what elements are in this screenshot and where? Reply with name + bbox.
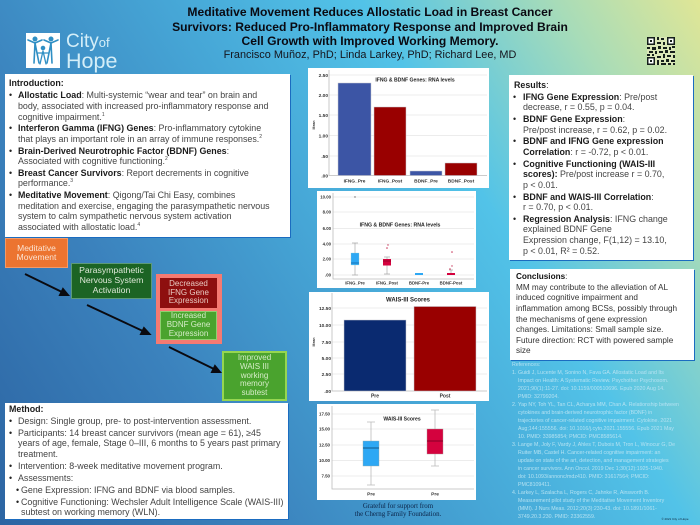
- references: Lange M, Joly F, Vardy J, Ahles T, Dubois M, Tron L, Winocur G, De: [518, 442, 675, 448]
- panel: results: r = 0.70, p < 0.01.: [523, 202, 593, 212]
- panel: method: Design: Single group, pre- to post-intervention assessment.: [18, 416, 251, 426]
- panel: conclusions: MM may contribute to the alleviation of AL: [516, 283, 668, 292]
- panel: conclusions: [510, 269, 694, 360]
- acknowledgement: Grateful for support from: [363, 503, 433, 510]
- references: 10. PMID: 33985854; PMCID: PMC8585614.: [518, 434, 622, 440]
- panel: results: Correlation: r = -0.72, p < 0.01.: [523, 147, 648, 157]
- panel: conclusions: size: [516, 346, 531, 355]
- copyright: © 2021 City of Hope: [661, 517, 689, 521]
- panel: introduction: cognitive impairment.1: [18, 112, 105, 122]
- logo: City of Hope: Hope: [66, 49, 117, 73]
- box plot: WAIS-III scores: 7.50: [321, 474, 331, 478]
- bar chart: RNA levels means: .50: [321, 154, 328, 160]
- panel: introduction: Brain-Derived Neurotrophic Factor (BDNF) Genes:: [18, 146, 229, 156]
- flow box: gene expression group: [156, 274, 222, 344]
- panel: results: Pre/post increase, r = 0.62, p = 0.02.: [523, 125, 667, 135]
- box plot: WAIS-III scores: 17.50: [319, 412, 331, 416]
- references: 2.: [512, 402, 516, 408]
- flow box: parasympathetic activation: Nervous System: [80, 275, 143, 285]
- panel: results: Regression Analysis: IFNG change: [523, 214, 668, 224]
- bar chart: RNA levels means: BDNF_Post: [448, 178, 475, 184]
- title: Cell Growth with Improved Working Memory.: [242, 34, 498, 48]
- flow box: increased BDNF: BDNF Gene: [167, 320, 210, 329]
- box plot: RNA levels: BDNF-Pre: [409, 280, 430, 286]
- bar chart: RNA levels means: 2.50: [319, 73, 328, 79]
- flow box: improved WAIS III: [222, 351, 287, 401]
- references: 3.: [512, 442, 516, 448]
- panel: results: Cognitive Functioning (WAIS-III: [523, 159, 655, 169]
- flow box: meditative movement: Meditative: [17, 243, 56, 253]
- box plot: RNA levels: 6.00: [323, 226, 332, 231]
- bar chart: WAIS-III scores means: [309, 292, 489, 401]
- box plot: WAIS-III scores: 15.00: [319, 426, 331, 432]
- panel: introduction: performance.3: [18, 178, 73, 188]
- flow box: decreased IFNG: Decreased: [169, 279, 208, 288]
- bar chart: WAIS-III scores means: Post: [440, 394, 451, 400]
- authors: Francisco Muñoz, PhD; Linda Larkey, PhD; Richard Lee, MD: [224, 48, 516, 60]
- bar chart: WAIS-III scores means: Pre: [371, 394, 379, 400]
- panel: method: Assessments:: [18, 473, 73, 483]
- bar chart: WAIS-III scores means: 2.50: [322, 372, 331, 378]
- panel: method: Participants: 14 breast cancer survivors (mean age = 61), ≥45: [18, 428, 261, 438]
- box plot: RNA levels: IFNG & BDNF Genes: RNA levels: [360, 222, 441, 228]
- box plot: RNA levels: BDNF-Post: [440, 280, 463, 286]
- title: Meditative Movement Reduces Allostatic Load in Breast Cancer: [187, 5, 553, 19]
- acknowledgement: the Cherng Family Foundation.: [355, 511, 441, 518]
- box plot: WAIS-III scores: Pre: [367, 492, 375, 498]
- panel: method: [5, 403, 288, 519]
- references: Impact on Health: A Systematic Review. Psychother Psychosom.: [518, 378, 668, 384]
- panel: introduction: Meditative Movement: Qigong/Tai Chi Easy, combines: [18, 190, 235, 200]
- panel: results: [509, 75, 693, 260]
- panel: results: BDNF and WAIS-III Correlation:: [523, 192, 654, 202]
- flow box: decreased IFNG: Expression: [169, 296, 208, 305]
- panel: results: p < 0.01.: [523, 180, 558, 190]
- flow box: improved WAIS III: subtest: [242, 388, 267, 397]
- panel: method: Intervention: 8-week meditative movement program.: [18, 461, 223, 471]
- bar chart: RNA levels means: Mean: [312, 121, 316, 129]
- references: 4.: [512, 490, 516, 496]
- box plot: RNA levels: 10.00: [320, 194, 332, 200]
- panel: introduction: system to calm sympathetic nervous system activation: [18, 211, 232, 221]
- box plot: WAIS-III scores: Pre: [431, 492, 439, 498]
- panel: conclusions: the mechanisms of gene expression: [516, 315, 647, 324]
- references: Guidi J, Lucente M, Sonino N, Fava GA. Allostatic Load and Its: [518, 370, 664, 376]
- title: [172, 5, 568, 48]
- panel: results: Results:: [514, 80, 549, 90]
- flow box: increased BDNF: Increased: [171, 311, 206, 320]
- references: Larkey L, Szalacha L, Rogers C, Jahnke R, Ainsworth B.: [518, 490, 649, 496]
- flow box: increased BDNF: Expression: [169, 329, 208, 338]
- panel: introduction: [5, 74, 290, 237]
- box plot: RNA levels: .00: [325, 272, 332, 278]
- flow box: improved WAIS III: working: [241, 371, 268, 380]
- references: Ruiter MB, Castel H. Cancer-related cognitive impairment: an: [518, 450, 660, 456]
- panel: method: subtest on working memory (WLN).: [21, 507, 160, 517]
- bar chart: WAIS-III scores means: 10.00: [319, 323, 331, 329]
- acknowledgement: [354, 502, 441, 518]
- bar chart: WAIS-III scores means: 12.50: [319, 306, 331, 312]
- title: Survivors: Reduced Pro-Inflammatory Response and Improved Brain: [172, 20, 568, 34]
- panel: conclusions: induced cognitive impairment and: [516, 293, 638, 302]
- box plot: RNA levels: 4.00: [323, 242, 332, 246]
- bar chart: WAIS-III scores means: WAIS-III Scores: [386, 298, 431, 304]
- flow box: improved WAIS III: WAIS III: [240, 362, 269, 371]
- bar chart: WAIS-III scores means: 5.00: [322, 356, 331, 362]
- references: 3749.20.3.230. PMID: 23362559.: [518, 514, 595, 520]
- box plot: RNA levels: IFNG_Post: [376, 280, 399, 286]
- flow box: parasympathetic activation: Activation: [93, 285, 130, 295]
- references: PMID: 32799204.: [518, 394, 559, 400]
- panel: introduction: body, associated with increased pro-inflammatory response and: [18, 101, 268, 111]
- flow box: parasympathetic activation: [71, 263, 152, 299]
- flow box: decreased IFNG: [160, 278, 217, 308]
- panel: introduction: Interferon Gamma (IFNG) Genes: Pro-inflammatory cytokine: [18, 123, 261, 133]
- panel: introduction: meditation and exercise, engaging the parasympathetic nervous: [18, 201, 270, 211]
- box plot: WAIS-III scores: WAIS-III Scores: [383, 417, 421, 423]
- bar chart: WAIS-III scores means: .00: [324, 389, 331, 395]
- panel: results: explained BDNF Gene: [523, 224, 612, 234]
- bar chart: RNA levels means: [308, 68, 489, 188]
- box plot: RNA levels: IFNG_Pre: [345, 280, 365, 286]
- panel: method: treatment.: [18, 449, 58, 459]
- panel: results: p < 0.01, R² = 0.52.: [523, 246, 599, 256]
- logo: City of Hope: [26, 31, 117, 73]
- references: 1.: [512, 370, 516, 376]
- flow box: meditative movement: [5, 238, 68, 268]
- bar chart: RNA levels means: BDNF_Pre: [414, 178, 438, 184]
- bar chart: RNA levels means: 2.00: [319, 93, 328, 99]
- bar chart: RNA levels means: IFNG_Pre: [344, 178, 366, 184]
- box plot: RNA levels: [317, 191, 476, 288]
- panel: method: Method:: [9, 404, 44, 414]
- panel: introduction: Allostatic Load: Multi-systemic “wear and tear” on brain and: [18, 90, 257, 100]
- panel: conclusions: changes. Limitations: Small sample size.: [516, 325, 663, 334]
- panel: introduction: Introduction:: [9, 78, 64, 88]
- panel: introduction: associated with allostatic load.4: [18, 222, 140, 232]
- icon: QR code: [647, 37, 675, 65]
- panel: results: BDNF and IFNG Gene expression: [523, 136, 664, 146]
- bar chart: WAIS-III scores means: Mean: [312, 338, 316, 346]
- panel: method: Gene Expression: IFNG and BDNF via blood samples.: [21, 485, 235, 495]
- bar chart: RNA levels means: 1.50: [319, 113, 328, 119]
- references: [512, 362, 679, 520]
- box plot: WAIS-III scores: 10.00: [319, 458, 331, 463]
- panel: results: BDNF Gene Expression:: [523, 114, 625, 124]
- references: Measurement pilot study of the Meditative Movement Inventory: [518, 498, 664, 504]
- references: in cancer survivors. Ann Oncol. 2019 Dec 1;30(12):1925-1940.: [518, 466, 663, 472]
- flow box: increased BDNF: [160, 311, 217, 340]
- logo: City of Hope: Cityof: [66, 31, 110, 52]
- panel: conclusions: Conclusions:: [516, 272, 567, 281]
- panel: conclusions: inflammation among BCSs, possibly through: [516, 304, 677, 313]
- references: trajectories of cancer-related cognitive impairment. Cytokine. 2021: [518, 418, 672, 424]
- references: PMC8109411.: [518, 482, 551, 488]
- references: References:: [512, 362, 540, 368]
- panel: introduction: Associated with cognitive functioning.2: [18, 156, 168, 166]
- bar chart: RNA levels means: IFNG_Post: [378, 178, 403, 184]
- box plot: RNA levels: 2.00: [323, 256, 332, 262]
- panel: introduction: Breast Cancer Survivors: Report decrements in cognitive: [18, 168, 249, 178]
- bar chart: RNA levels means: 1.00: [319, 134, 328, 140]
- panel: method: years of age, female, Stage 0–III, 6 months to 5 years past primary: [18, 438, 280, 448]
- flow box: meditative movement: Movement: [17, 252, 56, 262]
- references: Aug;144:155556. doi: 10.1016/j.cyto.2021.155556. Epub 2021 May: [518, 426, 674, 432]
- panel: results: Expression change, F(1,12) = 13.10,: [523, 235, 667, 245]
- flow box: parasympathetic activation: Parasympathetic: [79, 265, 144, 275]
- references: cytokines and brain-derived neurotrophic factor (BDNF) in: [518, 410, 652, 416]
- panel: results: scores): Pre/post increase r = 0.70,: [523, 169, 664, 179]
- arrows: flow sequence: [24, 273, 222, 373]
- panel: conclusions: Future direction: RCT with powered sample: [516, 336, 673, 345]
- references: doi: 10.1093/annonc/mdz410. PMID: 31617564; PMCID:: [518, 474, 649, 480]
- panel: introduction: that plays an important role in an array of immune responses.2: [18, 134, 262, 144]
- box plot: RNA levels: 8.00: [323, 210, 332, 214]
- panel: method: Cognitive Functioning: Wechsler Adult Intelligence Scale (WAIS-III): [21, 497, 283, 507]
- bar chart: RNA levels means: .00: [321, 174, 328, 180]
- bar chart: RNA levels means: IFNG & BDNF Genes: RNA levels: [375, 78, 455, 84]
- box plot: WAIS-III scores: [317, 404, 476, 500]
- references: 2021;90(1):11-27. doi: 10.1159/000510696. Epub 2020 Aug 14.: [518, 386, 665, 392]
- panel: results: IFNG Gene Expression: Pre/post: [523, 92, 657, 102]
- box plot: WAIS-III scores: 12.50: [319, 442, 331, 448]
- flow box: improved WAIS III: memory: [240, 379, 269, 388]
- bar chart: WAIS-III scores means: 7.50: [322, 340, 331, 346]
- flow box: improved WAIS III: Improved: [238, 353, 271, 362]
- references: update on state of the art, detection, and management strategies: [518, 458, 669, 464]
- panel: results: decrease, r = 0.55, p = 0.04.: [523, 102, 635, 112]
- flow box: decreased IFNG: IFNG Gene: [168, 288, 209, 297]
- references: Yap NY, Toh YL, Tan CL, Acharya MM, Chan A. Relationship between: [518, 402, 679, 408]
- references: (MMI). J Nurs Meas. 2012;20(3):230-43. doi: 10.1891/1061-: [518, 506, 657, 512]
